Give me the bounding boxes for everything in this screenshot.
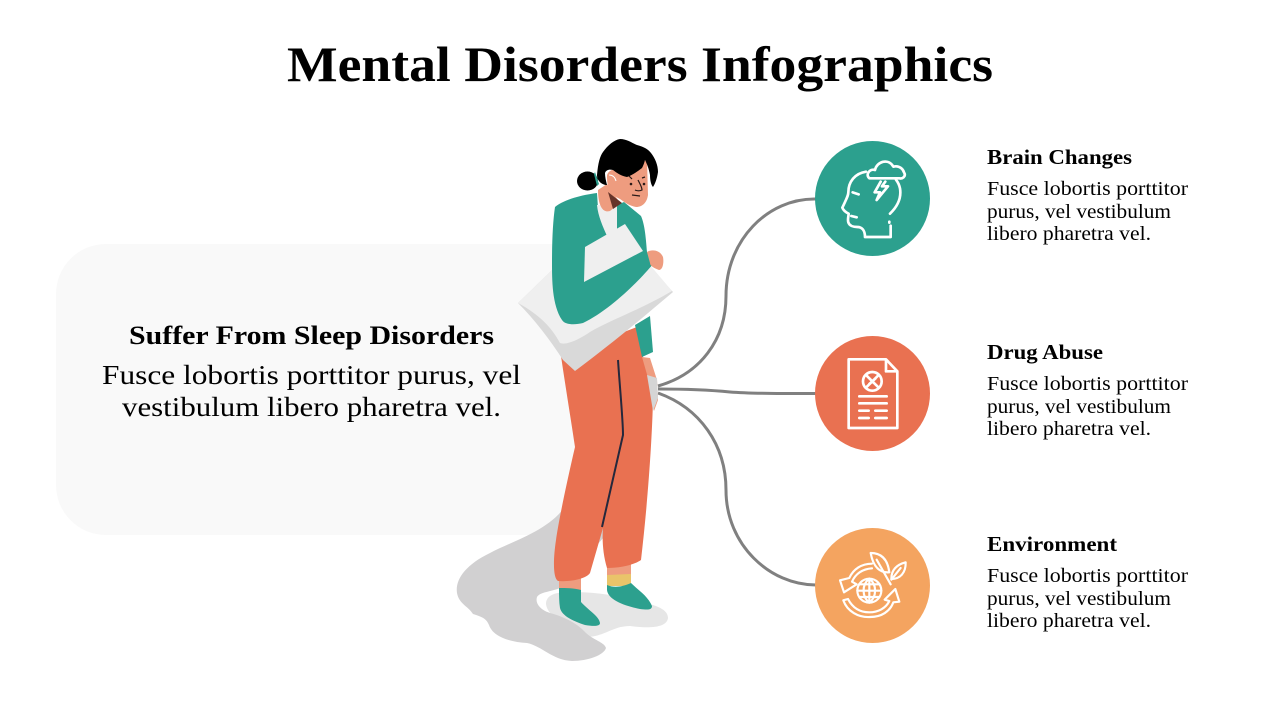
item text <box>987 178 1188 245</box>
facial features <box>629 176 645 196</box>
item text: libero pharetra vel. <box>987 223 1151 245</box>
trousers <box>554 327 653 581</box>
floor shadow, dark <box>457 480 610 661</box>
item text: purus, vel vestibulum <box>987 201 1171 223</box>
face <box>607 160 648 207</box>
item text: Fusce lobortis porttitor <box>987 373 1188 395</box>
hair bun <box>577 172 598 190</box>
illustration: woman holding pillow <box>457 139 673 661</box>
item text: Fusce lobortis porttitor <box>987 178 1188 200</box>
title: Mental Disorders Infographics <box>287 36 993 92</box>
jacket hem <box>635 316 653 357</box>
ear highlight <box>609 175 616 181</box>
panel text: Fusce lobortis porttitor purus, vel <box>102 359 521 390</box>
hand at pocket <box>642 357 658 411</box>
item text: Fusce lobortis porttitor <box>987 565 1188 587</box>
hand on pillow <box>647 250 663 270</box>
item: drug abuse <box>815 336 1188 451</box>
icon: medical document <box>849 359 897 428</box>
panel heading: Suffer From Sleep Disorders <box>129 321 494 350</box>
pant cuffs and ankles <box>559 578 581 595</box>
orange circle <box>815 336 930 451</box>
item text: purus, vel vestibulum <box>987 396 1171 418</box>
shoes <box>559 583 652 626</box>
shirt <box>597 205 617 236</box>
item text <box>987 565 1188 632</box>
teal circle <box>815 141 930 256</box>
hair <box>597 139 658 187</box>
trouser seam <box>602 360 623 527</box>
pillow <box>518 267 673 371</box>
item text <box>987 373 1188 440</box>
neck and collar <box>598 184 620 211</box>
panel text <box>102 359 521 422</box>
pillow corner between arms <box>584 224 643 282</box>
item heading: Brain Changes <box>987 145 1132 169</box>
item: environment <box>815 528 1188 643</box>
item heading: Environment <box>987 532 1118 556</box>
item text: libero pharetra vel. <box>987 610 1151 632</box>
item: brain changes <box>815 141 1188 256</box>
icon: head with storm cloud <box>842 162 905 237</box>
item text: libero pharetra vel. <box>987 418 1151 440</box>
jacket and arm <box>552 193 653 324</box>
panel text: vestibulum libero pharetra vel. <box>122 391 501 422</box>
panel: sleep disorders callout <box>56 244 616 535</box>
connector lines <box>658 199 816 585</box>
icon: globe with recycling arrows and leaves <box>840 553 906 617</box>
item text: purus, vel vestibulum <box>987 588 1171 610</box>
light orange circle <box>815 528 930 643</box>
item heading: Drug Abuse <box>987 340 1103 364</box>
floor shadow, light <box>546 592 668 637</box>
